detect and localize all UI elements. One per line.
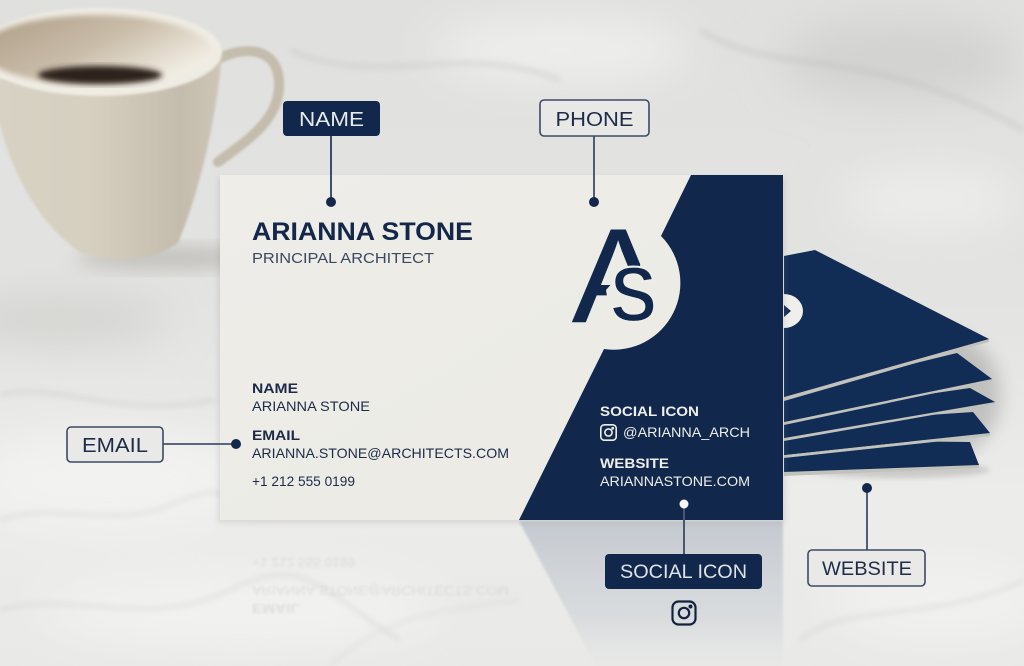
stack card 4 bbox=[784, 412, 990, 458]
coffee cup bbox=[0, 8, 279, 270]
card reflection: +1 212 555 0199 bbox=[252, 555, 355, 570]
logo monogram: A bbox=[572, 202, 665, 351]
callout: social icon: SOCIAL ICON bbox=[620, 562, 747, 583]
card reflection bbox=[252, 521, 783, 666]
logo monogram bbox=[572, 230, 654, 322]
business card front bbox=[218, 175, 785, 523]
coffee bbox=[38, 66, 162, 84]
stack card 1 bbox=[765, 250, 989, 401]
callout: phone bbox=[540, 100, 649, 207]
social and website details: WEBSITE bbox=[600, 455, 669, 471]
stack card 5 bbox=[784, 440, 990, 478]
callout: name: NAME bbox=[299, 109, 364, 131]
callout: email bbox=[67, 427, 241, 462]
card reflection: ARIANNA.STONE@ARCHITECTS.COM bbox=[252, 583, 509, 598]
callout: name bbox=[283, 101, 380, 207]
stack card 2 bbox=[784, 353, 992, 425]
contact details: ARIANNA.STONE@ARCHITECTS.COM bbox=[252, 445, 509, 461]
logo monogram: S bbox=[610, 250, 657, 338]
contact details: +1 212 555 0199 bbox=[252, 473, 355, 489]
callout: phone: PHONE bbox=[556, 109, 634, 131]
contact details bbox=[252, 380, 509, 489]
stack card 3 bbox=[784, 388, 995, 441]
contact details: EMAIL bbox=[252, 427, 300, 443]
callout: social icon bbox=[605, 500, 762, 624]
contact details: ARIANNA STONE bbox=[252, 398, 370, 414]
callout: email: EMAIL bbox=[82, 435, 148, 457]
stacked business cards bbox=[765, 250, 1000, 478]
social and website details bbox=[600, 403, 750, 489]
social and website details: @ARIANNA_ARCH bbox=[623, 424, 750, 440]
callout: website: WEBSITE bbox=[822, 559, 912, 580]
contact details: NAME bbox=[252, 380, 298, 396]
name and title bbox=[252, 218, 473, 267]
icon: instagram small bbox=[601, 425, 616, 440]
social and website details: SOCIAL ICON bbox=[600, 403, 699, 419]
callout: website bbox=[808, 483, 925, 586]
card reflection: EMAIL bbox=[252, 601, 300, 616]
name and title: ARIANNA STONE bbox=[252, 218, 473, 246]
navy diagonal panel bbox=[519, 175, 783, 520]
name and title: PRINCIPAL ARCHITECT bbox=[252, 250, 434, 267]
icon: instagram bbox=[672, 602, 696, 624]
social and website details: ARIANNASTONE.COM bbox=[600, 473, 750, 489]
card base bbox=[220, 175, 783, 520]
